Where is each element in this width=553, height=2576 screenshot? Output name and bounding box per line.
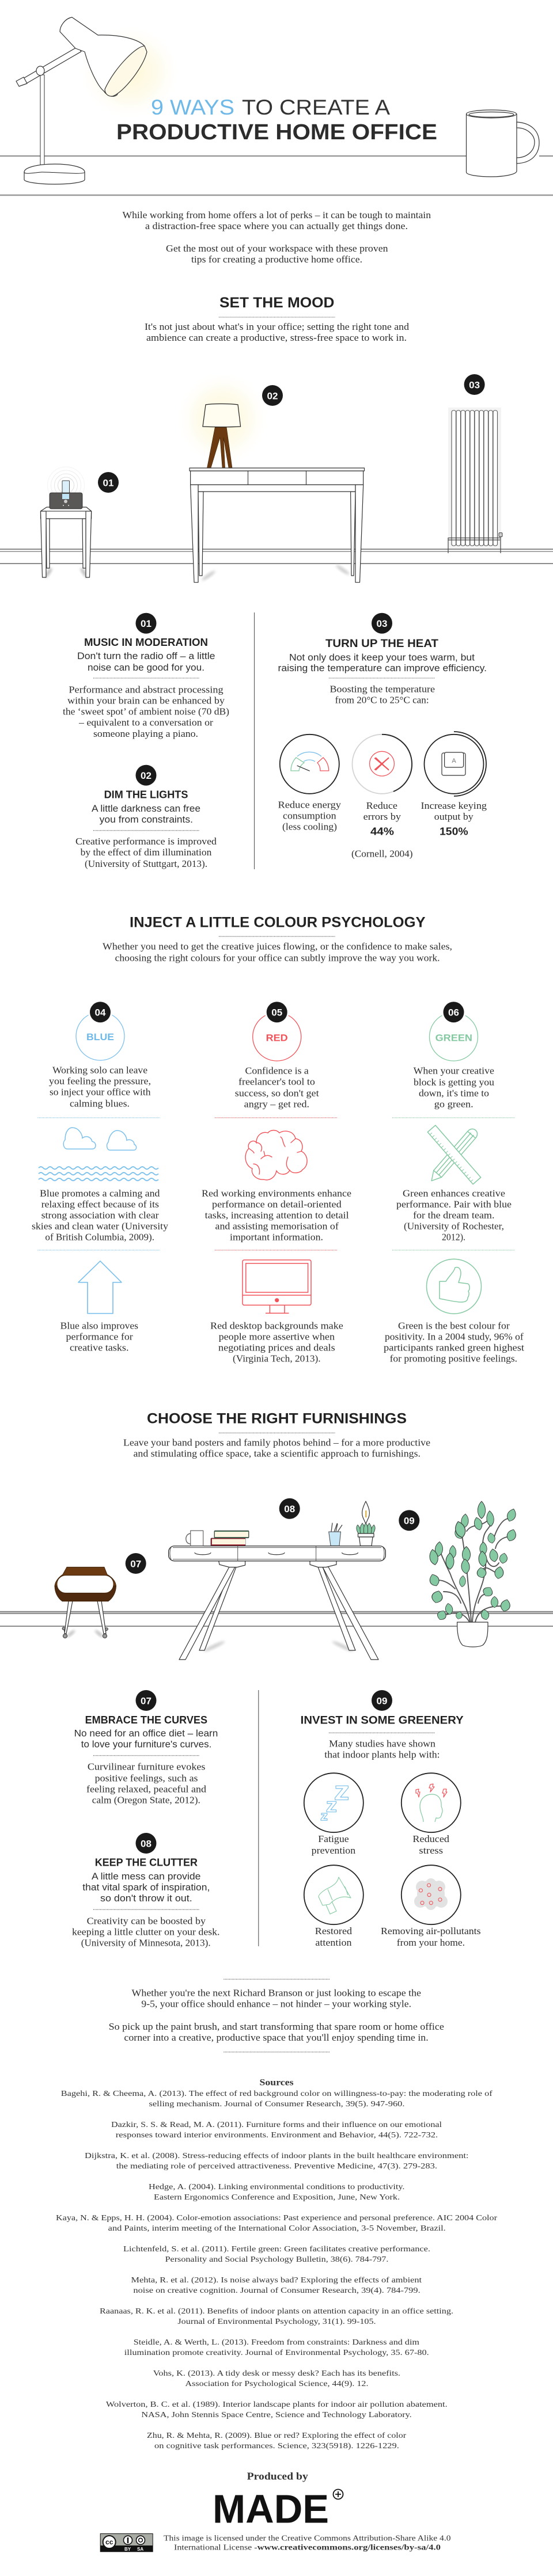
colour circle: red: RED (266, 1033, 288, 1043)
icon: up arrow (78, 1261, 122, 1314)
source list (56, 2089, 498, 2450)
badge 01 (98, 472, 119, 493)
body text (86, 1761, 207, 1805)
icon: tripod table lamp (203, 404, 241, 468)
text (384, 1320, 524, 1364)
badge 08: 08 (284, 1504, 295, 1515)
section intro: Leave your band posters and family photos behind – for a more productive (123, 1437, 430, 1448)
text: tasks, increasing attention to detail (205, 1209, 349, 1220)
badge 03 (372, 613, 392, 634)
icon: keyboard key in circle: A (452, 758, 456, 764)
text: skies and clean water (University (32, 1220, 169, 1231)
badge 03: 03 (469, 380, 480, 390)
text: Working solo can leave (52, 1064, 147, 1075)
source list: Lichtenfeld, S. et al. (2011). Fertile green: Green facilitates creative performance. (123, 2244, 430, 2253)
badge 01 (136, 613, 157, 634)
section intro (145, 321, 410, 343)
body text: positive feelings, such as (95, 1772, 198, 1783)
text: down, it's time to (419, 1087, 489, 1098)
caption: energy (278, 799, 342, 832)
text: relaxing effect because of its (41, 1198, 159, 1209)
icon: stressed head (402, 1773, 461, 1832)
icon: ruler and pencil (427, 1125, 481, 1184)
text: people more assertive when (219, 1331, 335, 1342)
icon: console table (190, 468, 364, 583)
citation: (Cornell, 2004) (351, 848, 412, 859)
source list: noise on creative cognition. Journal of Consumer Research, 39(4). 784-799. (133, 2286, 421, 2295)
colour circle: green (430, 1000, 478, 1061)
body text: the ‘sweet spot’ of ambient noise (70 dB) (63, 706, 229, 717)
header illustration (0, 17, 553, 184)
icon: side table (40, 507, 92, 577)
text: Blue also improves (60, 1320, 138, 1331)
text: negotiating prices and deals (218, 1342, 335, 1353)
heading: INVEST IN SOME GREENERY (301, 1714, 464, 1727)
source list: Mehta, R. et al. (2012). Is noise always bad? Exploring the effects of ambient (131, 2276, 422, 2284)
icon: desk lamp (16, 17, 147, 184)
source list: Vohs, K. (2013). A tidy desk or messy desk? Each has its benefits. (153, 2369, 400, 2377)
tip 01: music in moderation (63, 613, 229, 739)
subheading: so don't throw it out. (100, 1893, 192, 1904)
heading: CHOOSE THE RIGHT FURNISHINGS (147, 1410, 407, 1426)
intro text: While working from home offers a lot of perks – it can be tough to maintain (122, 210, 431, 220)
text: Red desktop backgrounds make (210, 1320, 343, 1331)
body text: feeling relaxed, peaceful and (86, 1783, 207, 1794)
source list: Bagehi, R. & Cheema, A. (2013). The effect of red background color on willingness-to-pay: the moderating role of (61, 2089, 493, 2098)
source list: on cognitive task performances. Science, 323(5918). 1226-1229. (154, 2441, 399, 2450)
icon: gauge in circle (280, 735, 339, 794)
icon: clouds and water (39, 1128, 158, 1181)
heading: set the mood: SET THE MOOD (219, 295, 334, 311)
caption: energy: consumption (283, 810, 336, 821)
intro text: Get the most out of your workspace with these proven (166, 243, 388, 254)
heading: INJECT A LITTLE COLOUR PSYCHOLOGY (130, 915, 426, 931)
sources heading: Sources (259, 2078, 294, 2088)
badge 08 (279, 1498, 300, 1519)
body text: (University of Stuttgart, 2013). (85, 858, 207, 869)
heading: KEEP THE CLUTTER (95, 1857, 198, 1869)
icon: creative commons badge: BY (124, 2547, 131, 2552)
icon: pencil cup (329, 1523, 342, 1546)
caption: attention: Restored (315, 1926, 353, 1936)
text: Green enhances creative (403, 1188, 505, 1198)
caption: fatigue: prevention (312, 1845, 355, 1856)
footer: produced by: Produced by (247, 2471, 308, 2482)
text: so inject your office with (50, 1086, 151, 1097)
text: (Virginia Tech, 2013). (233, 1353, 321, 1364)
badge 09 (399, 1510, 419, 1531)
badge 07 (136, 1690, 157, 1711)
icon: lamp glow (177, 372, 267, 465)
text (60, 1320, 138, 1353)
source list: NASA, John Stennis Space Centre, Science and Technology Laboratory. (141, 2410, 412, 2419)
section intro: choosing the right colours for your office can subtly improve the way you work. (115, 952, 440, 963)
text (235, 1065, 319, 1109)
icon: small mug (186, 1531, 203, 1546)
tip 02: dim the lights (75, 765, 217, 869)
text: for promoting positive feelings. (390, 1353, 517, 1364)
text: creative tasks. (70, 1342, 129, 1353)
tip 08: keep the clutter (72, 1833, 220, 1948)
body text: – equivalent to a conversation or (78, 717, 214, 728)
badge 07: 07 (141, 1695, 151, 1706)
column: red (202, 1000, 351, 1364)
badge 02 (262, 385, 283, 406)
subheading (278, 652, 487, 674)
text: angry – get red. (244, 1098, 309, 1109)
icon: creative commons badge: cc (105, 2538, 113, 2546)
colour circle: green: GREEN (435, 1033, 472, 1043)
caption: pollutants: from your home. (397, 1937, 465, 1948)
subheading (77, 651, 215, 673)
source list: Raanaas, R. K. et al. (2011). Benefits of indoor plants on attention capacity in an office setting. (100, 2307, 453, 2315)
title: TO CREATE A (242, 96, 390, 119)
badge 03: 03 (377, 618, 387, 629)
icon: desk with clutter (169, 1501, 385, 1660)
caption: stress: Reduced (412, 1833, 450, 1844)
room illustration: mood (0, 372, 553, 583)
body text: someone playing a piano. (93, 728, 198, 739)
colour circle: blue: 04 (95, 1007, 106, 1018)
subheading (92, 804, 200, 825)
text: performance on detail-oriented (212, 1198, 342, 1209)
closing text: Whether you're the next Richard Branson or just looking to escape the (131, 1988, 421, 1999)
source list: Steidle, A. & Werth, L. (2013). Freedom from constraints: Darkness and dim (134, 2338, 420, 2346)
icon: radio with sound waves (47, 467, 84, 509)
title: 9 WAYS (151, 96, 234, 119)
subheading: A little darkness can free (92, 804, 200, 814)
caption: stress: stress (419, 1845, 443, 1856)
text: success, so don't get (235, 1087, 319, 1098)
heading: DIM THE LIGHTS (104, 789, 188, 801)
icon: sleep z's (304, 1773, 363, 1832)
text: Green is the best colour for (398, 1320, 510, 1331)
intro text: a distraction-free space where you can actually get things done. (145, 220, 408, 231)
text: (University of Rochester, (404, 1220, 504, 1231)
tip 03: turn up the heat (278, 613, 487, 859)
caption: errors (363, 800, 402, 838)
badge 09: 09 (404, 1516, 415, 1527)
source list: Wolverton, B. C. et al. (1989). Interior landscape plants for indoor air pollution abatement. (106, 2400, 448, 2408)
caption: errors: Reduce (366, 800, 397, 811)
tip 07: embrace the curves (74, 1690, 218, 1805)
text: block is getting you (414, 1076, 494, 1087)
icon: light glow (81, 26, 179, 118)
text: for the dream team. (413, 1209, 494, 1220)
source list: selling mechanism. Journal of Consumer Research, 39(5). 947-960. (149, 2099, 404, 2108)
section intro: and stimulating office space, take a scientific approach to furnishings. (134, 1448, 421, 1459)
body text: calm (Oregon State, 2012). (92, 1794, 200, 1805)
subheading (82, 1871, 210, 1904)
text: go green. (434, 1098, 474, 1109)
closing text: corner into a creative, productive space that you'll enjoy spending time in. (124, 2032, 429, 2043)
subheading: you from constraints. (100, 815, 193, 825)
text: participants ranked green highest (384, 1342, 524, 1353)
icon: stacked books (211, 1531, 249, 1546)
badge 09 (372, 1690, 392, 1711)
text (396, 1188, 512, 1242)
body text: that indoor plants help with: (324, 1749, 440, 1760)
caption: attention: attention (315, 1937, 351, 1948)
title (116, 96, 437, 144)
licence text: International License - (174, 2543, 257, 2551)
column: blue (32, 1000, 169, 1353)
caption: keying: output by (434, 811, 474, 822)
subheading: Not only does it keep your toes warm, but (289, 652, 475, 663)
colour circle: blue: BLUE (86, 1032, 114, 1042)
licence text (164, 2533, 451, 2551)
licence text: This image is licensed under the Creative Commons Attribution-Share Alike 4.0 (164, 2533, 451, 2542)
body text: from 20°C to 25°C can: (335, 694, 429, 705)
body text: Boosting the temperature (329, 683, 435, 694)
caption: energy: Reduce energy (278, 799, 342, 810)
caption: keying (421, 800, 487, 838)
badge 02: 02 (141, 770, 151, 781)
heading: EMBRACE THE CURVES (85, 1714, 207, 1726)
body text: within your brain can be enhanced by (67, 695, 225, 706)
text: Red working environments enhance (202, 1188, 351, 1198)
body text: Performance and abstract processing (69, 684, 224, 695)
text: Confidence is a (245, 1065, 309, 1076)
source list: Dijkstra, K. et al. (2008). Stress-reducing effects of indoor plants in the built healthcare environment: (85, 2151, 469, 2160)
text (202, 1188, 351, 1242)
text: performance for (66, 1331, 133, 1342)
source list: Journal of Environmental Psychology, 31(1). 99-105. (177, 2317, 376, 2326)
source list: responses toward interior environments. Environment and Behavior, 44(5). 722-732. (116, 2130, 438, 2139)
caption: fatigue (312, 1833, 355, 1856)
icon: air pollutants (402, 1865, 461, 1924)
icon: curved chair (55, 1567, 116, 1638)
body text: Creativity can be boosted by (87, 1915, 206, 1926)
text: important information. (230, 1231, 323, 1242)
text: performance. Pair with blue (396, 1198, 512, 1209)
subheading: raising the temperature can improve efficiency. (278, 663, 487, 674)
caption: pollutants (381, 1926, 481, 1948)
caption: stress (412, 1833, 450, 1856)
heading: TURN UP THE HEAT (325, 637, 438, 650)
source list: Personality and Social Psychology Bulletin, 38(6). 784-797. (165, 2255, 388, 2263)
source list: illumination promote creativity. Journal of Environmental Psychology, 35. 67-80. (124, 2348, 429, 2357)
text (210, 1320, 343, 1364)
badge 09: 09 (377, 1695, 387, 1706)
source list: Eastern Ergonomics Conference and Exposition, June, New York. (154, 2193, 400, 2201)
text: strong association with clear (41, 1209, 159, 1220)
icon: potted plant (428, 1501, 518, 1647)
icon: coffee mug (467, 110, 539, 177)
colour circle: red: 05 (271, 1007, 282, 1018)
section intro (123, 1437, 430, 1459)
text (32, 1188, 169, 1242)
column: green (384, 1000, 524, 1364)
icon: megaphone (304, 1865, 363, 1924)
source list: Hedge, A. (2004). Linking environmental conditions to productivity. (149, 2182, 404, 2191)
icon: thumbs up (426, 1259, 482, 1314)
icon: creative commons badge (100, 2533, 153, 2552)
icon: desk plant (357, 1501, 375, 1546)
icon: brain (245, 1131, 307, 1180)
icon: error cross in circle (353, 735, 412, 794)
section intro: ambience can create a productive, stress-free space to work in. (146, 332, 407, 343)
subheading: that vital spark of inspiration, (82, 1882, 210, 1893)
caption: fatigue: Fatigue (318, 1833, 349, 1844)
body text (75, 836, 217, 869)
subheading: A little mess can provide (92, 1871, 200, 1882)
subheading (74, 1729, 218, 1750)
body text (72, 1915, 220, 1948)
closing text: 9-5, your office should enhance – not hinder – your working style. (141, 1999, 411, 2010)
badge 03 (464, 374, 485, 395)
source list: the mediating role of perceived attractiveness. Preventive Medicine, 47(3). 279-283. (116, 2162, 437, 2170)
closing text (109, 1988, 444, 2043)
section intro: It's not just about what's in your office; setting the right tone and (145, 321, 410, 332)
subheading: No need for an office diet – learn (74, 1729, 218, 1739)
source list: and Paints, interim meeting of the International Color Association, 3-5 November, Brazil. (108, 2224, 446, 2232)
source list: Dazkir, S. S. & Read, M. A. (2011). Furniture forms and their influence on our emotional (111, 2120, 442, 2129)
subheading: Don't turn the radio off – a little (77, 651, 215, 661)
badge 07: 07 (130, 1558, 141, 1569)
badge 08 (136, 1833, 157, 1854)
body text (63, 684, 229, 739)
badge 01: 01 (141, 618, 151, 629)
text: and assisting memorisation of (215, 1220, 339, 1231)
source list: Association for Psychological Science, 44(9). 12. (185, 2379, 369, 2388)
icon: creative commons badge: SA (137, 2547, 143, 2552)
section intro (103, 941, 452, 963)
caption: pollutants: Removing air-pollutants (381, 1926, 481, 1936)
caption: keying: Increase keying (421, 800, 487, 811)
section: colour psychology (103, 915, 452, 963)
intro text: tips for creating a productive home office. (191, 254, 362, 265)
text: of British Columbia, 2009). (45, 1231, 154, 1242)
text: positivity. In a 2004 study, 96% of (385, 1331, 524, 1342)
text: When your creative (414, 1065, 494, 1076)
licence text: www.creativecommons.org/licenses/by-sa/4.0 (257, 2543, 441, 2551)
badge 02 (136, 765, 157, 786)
table line (0, 155, 553, 157)
text: calming blues. (70, 1098, 130, 1109)
logo: made: MADE (213, 2487, 329, 2532)
body text: Curvilinear furniture evokes (88, 1761, 205, 1772)
title: PRODUCTIVE HOME OFFICE (116, 120, 437, 144)
subheading: to love your furniture's curves. (81, 1740, 211, 1750)
badge 01: 01 (103, 478, 113, 488)
tip 09: invest in some greenery (301, 1690, 481, 1948)
colour circle: green: 06 (448, 1007, 459, 1018)
caption: keying: 150% (440, 826, 468, 838)
text (49, 1064, 151, 1109)
body text: (University of Minnesota, 2013). (81, 1937, 211, 1948)
caption: errors: errors by (363, 811, 402, 822)
section intro: Whether you need to get the creative juices flowing, or the confidence to make sales, (103, 941, 452, 952)
section: set the mood (145, 295, 410, 343)
body text: by the effect of dim illumination (81, 847, 211, 858)
body text (324, 1738, 440, 1760)
intro text (122, 210, 431, 265)
sources (56, 2078, 498, 2450)
icon: radiator (448, 408, 502, 553)
caption: energy: (less cooling) (282, 821, 337, 832)
text: 2012). (442, 1231, 465, 1242)
text: Blue promotes a calming and (40, 1188, 160, 1198)
colour circle: blue (76, 1000, 124, 1060)
source list: Zhu, R. & Mehta, R. (2009). Blue or red? Exploring the effect of color (147, 2431, 407, 2440)
section: furnishings (123, 1410, 430, 1459)
caption: attention (315, 1926, 353, 1948)
badge 02: 02 (267, 390, 278, 402)
subheading: noise can be good for you. (88, 663, 204, 673)
icon: keyboard key in circle (424, 732, 486, 796)
text (414, 1065, 494, 1109)
badge 08: 08 (141, 1838, 151, 1849)
badge 07 (126, 1553, 146, 1574)
icon: desktop monitor (243, 1260, 311, 1313)
text: you feeling the pressure, (49, 1075, 151, 1086)
heading: MUSIC IN MODERATION (84, 637, 208, 648)
body text: Creative performance is improved (75, 836, 217, 847)
footer: produced by (100, 2471, 451, 2552)
source list: Kaya, N. & Epps, H. H. (2004). Color-emotion associations: Past experience and personal preference. AIC 2004 Color (56, 2213, 498, 2222)
colour circle: red (253, 1000, 301, 1061)
body text (329, 683, 435, 705)
closing text: So pick up the paint brush, and start transforming that spare room or home office (109, 2021, 444, 2032)
body text: Many studies have shown (329, 1738, 435, 1749)
text: freelancer's tool to (238, 1076, 315, 1087)
room illustration: furnishings (0, 1498, 553, 1660)
body text: keeping a little clutter on your desk. (72, 1926, 220, 1937)
caption: errors: 44% (370, 826, 394, 838)
